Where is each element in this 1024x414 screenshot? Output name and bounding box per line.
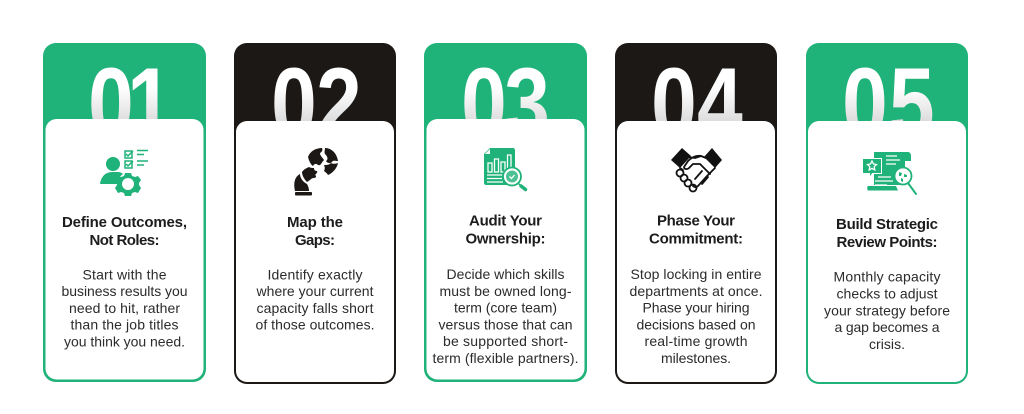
body text: must be owned long-: [440, 283, 572, 299]
number 03: 03: [461, 48, 550, 159]
body text: where your current: [256, 283, 374, 299]
body text: crisis.: [869, 336, 905, 352]
number 05: 05: [842, 48, 935, 159]
title: [287, 214, 343, 249]
title: Define Outcomes,: [62, 214, 187, 231]
body text: Start with the: [82, 266, 167, 282]
title: [649, 213, 743, 248]
title: Phase Your: [657, 213, 735, 230]
title: Map the: [287, 214, 343, 231]
body text: checks to adjust: [836, 286, 938, 302]
body text: [62, 266, 188, 350]
body text: term (core team): [454, 300, 557, 316]
number 01: 01: [88, 48, 173, 159]
body text: Phase your hiring: [642, 300, 750, 316]
title: [836, 216, 938, 251]
icon: handshake: [671, 148, 722, 192]
body text: need to hit, rather: [69, 300, 180, 316]
body text: versus those that can: [438, 316, 572, 332]
icon: person with checklist and gear: [100, 150, 148, 196]
body text: Stop locking in entire: [630, 266, 762, 282]
body text: capacity falls short: [256, 300, 374, 316]
body text: real-time growth: [644, 333, 748, 349]
body text: departments at once.: [630, 283, 762, 299]
body text: milestones.: [661, 350, 731, 366]
title: Ownership:: [466, 231, 546, 248]
number 04: 04: [651, 48, 743, 159]
body text: decisions based on: [636, 316, 756, 332]
number 02: 02: [271, 48, 362, 159]
body text: be supported short-: [443, 333, 568, 349]
panel: step 05: [806, 43, 968, 384]
icon: scroll with speech bubble and magnifier: [862, 152, 916, 194]
body text: you think you need.: [64, 334, 185, 350]
icon: hand with puzzle: [294, 148, 338, 196]
title: Gaps:: [295, 232, 335, 249]
body text: business results you: [62, 283, 188, 299]
title: Commitment:: [649, 231, 743, 248]
title: Audit Your: [469, 213, 542, 230]
panel: step 03: [424, 43, 587, 382]
icon: report with magnifier: [484, 148, 526, 190]
title: Not Roles:: [90, 232, 160, 249]
title: Build Strategic: [836, 216, 938, 233]
body text: Identify exactly: [268, 266, 362, 282]
body text: [256, 266, 374, 333]
body text: term (flexible partners).: [432, 350, 578, 366]
panel: step 01: [43, 43, 206, 382]
title: [62, 214, 187, 249]
title: Review Points:: [836, 234, 938, 251]
body text: [824, 269, 950, 352]
panel: step 02: [234, 43, 396, 384]
body text: Monthly capacity: [834, 269, 940, 285]
body text: of those outcomes.: [256, 317, 374, 333]
body text: [432, 266, 578, 366]
body text: a gap becomes a: [834, 319, 940, 335]
title: [466, 213, 546, 248]
body text: than the job titles: [70, 317, 178, 333]
body text: your strategy before: [824, 302, 950, 318]
body text: Decide which skills: [446, 266, 564, 282]
panel: step 04: [615, 43, 777, 384]
body text: [630, 266, 762, 366]
